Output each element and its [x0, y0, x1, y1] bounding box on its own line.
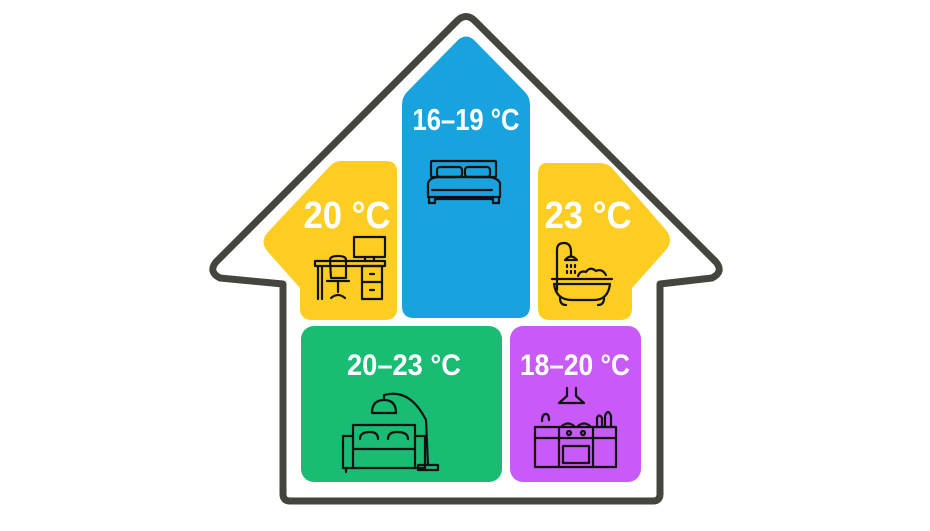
panel: office (yellow left)	[264, 161, 397, 320]
text: bedroom temp: 16–19 °C	[412, 102, 520, 137]
icon: sofa with lamp	[343, 394, 438, 472]
icon: bathtub	[552, 243, 612, 305]
icon: bed	[428, 161, 500, 203]
icon: kitchen	[535, 388, 616, 467]
icon: desk	[315, 237, 385, 299]
text: living room temp: 20–23 °C	[347, 349, 461, 382]
text: bathroom temp: 23 °C	[544, 195, 632, 237]
panel: kitchen (purple)	[510, 326, 641, 482]
panel: bathroom (yellow right)	[538, 163, 670, 320]
house outline	[213, 16, 719, 501]
panel: bedroom (blue)	[402, 36, 530, 318]
text: office temp: 20 °C	[304, 195, 390, 237]
panel: living room (green)	[301, 326, 502, 482]
text: kitchen temp: 18–20 °C	[520, 349, 630, 382]
